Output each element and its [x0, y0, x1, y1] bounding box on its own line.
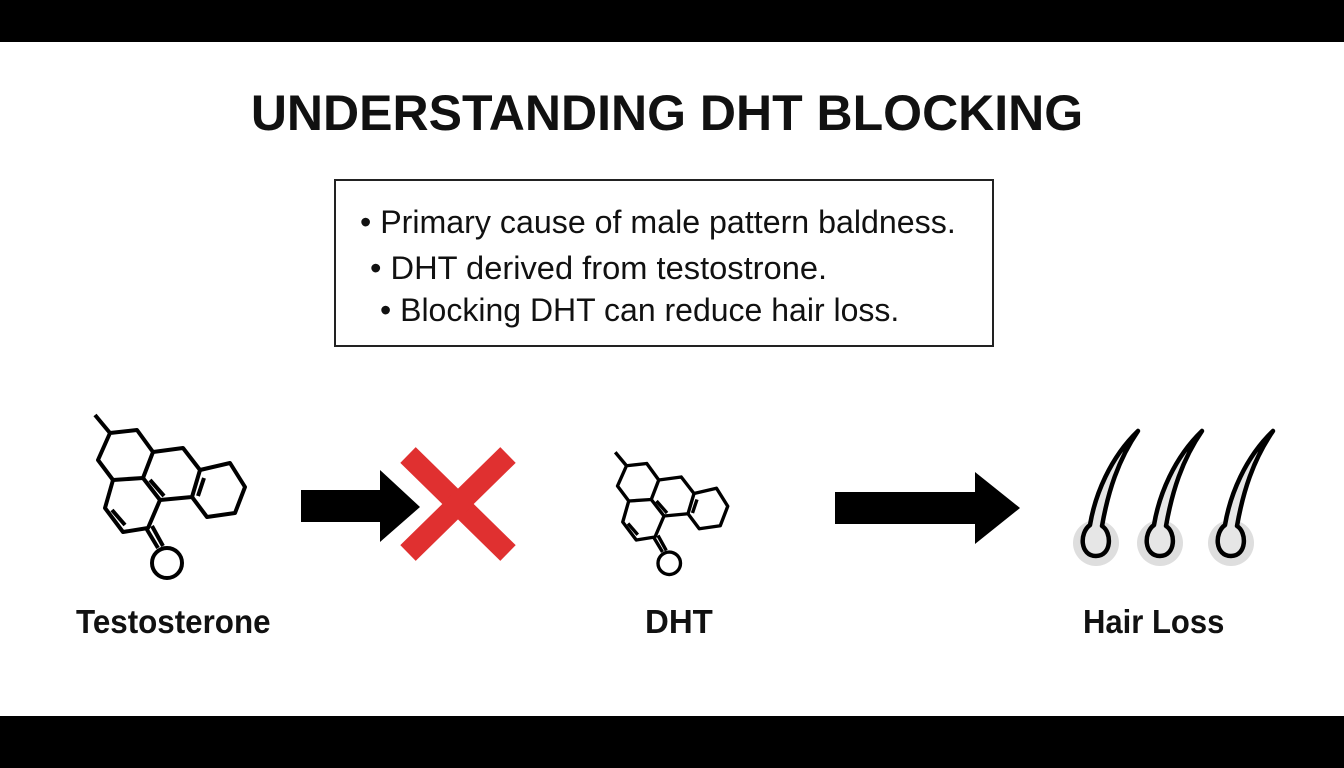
info box [334, 179, 994, 347]
arrow 2 [835, 472, 1020, 544]
label: DHT: DHT [645, 603, 713, 640]
icon: hair follicles [1073, 431, 1273, 566]
arrow 1 [301, 470, 420, 542]
title: UNDERSTANDING DHT BLOCKING [251, 85, 1083, 141]
icon: testosterone molecule [95, 415, 245, 578]
icon: red X [408, 455, 508, 553]
info box: • Primary cause of male pattern baldness. [360, 204, 956, 240]
icon: DHT molecule [615, 452, 728, 574]
info box: • DHT derived from testostrone. [370, 250, 827, 286]
label: testosterone: Testosterone [76, 603, 271, 640]
info box: • Blocking DHT can reduce hair loss. [380, 292, 899, 328]
label: hair loss: Hair Loss [1083, 603, 1224, 640]
